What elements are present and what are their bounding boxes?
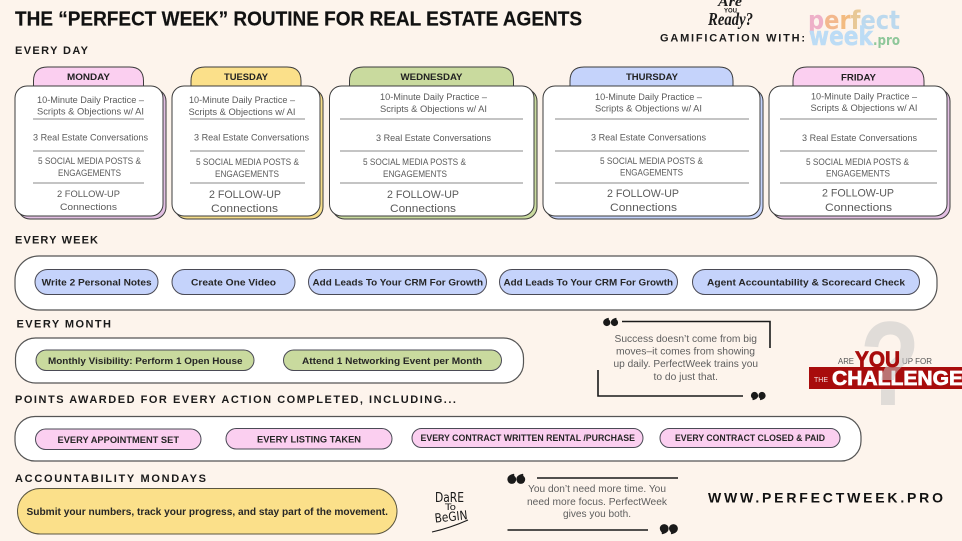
wednesday tab xyxy=(350,67,514,86)
friday tab xyxy=(793,67,924,86)
icon: dare to begin xyxy=(432,491,468,532)
monday tasks: 3 Real Estate Conversations xyxy=(33,132,148,144)
icon: grey question mark: ? xyxy=(860,297,920,431)
friday shadow xyxy=(772,89,950,219)
panel: points xyxy=(15,416,861,461)
monday tasks xyxy=(33,95,148,213)
pill: contract written xyxy=(412,428,643,448)
icon: dare to begin: To xyxy=(444,503,457,513)
monday tasks: 2 FOLLOW-UP xyxy=(57,189,120,200)
panel: thursday xyxy=(543,67,763,219)
wednesday tasks: 5 SOCIAL MEDIA POSTS & xyxy=(363,157,467,168)
pill: add leads two xyxy=(500,270,678,294)
wednesday tasks: 10-Minute Daily Practice – xyxy=(380,92,488,103)
pill: contract written: EVERY CONTRACT WRITTEN RENTAL /PURCHASE xyxy=(420,433,635,444)
badge: are you up for the challenge: CHALLENGE xyxy=(832,368,962,390)
thursday tasks: 10-Minute Daily Practice – xyxy=(595,92,703,103)
quote: success xyxy=(598,318,770,400)
thursday tab xyxy=(570,67,733,86)
quote text: to do just that. xyxy=(654,372,718,383)
pill: listing taken: EVERY LISTING TAKEN xyxy=(257,434,361,446)
pill: add leads one: Add Leads To Your CRM For Growth xyxy=(312,278,483,288)
tuesday shadow xyxy=(175,89,323,219)
wednesday tasks: 3 Real Estate Conversations xyxy=(376,133,491,144)
wednesday tasks: ENGAGEMENTS xyxy=(383,169,447,180)
panel: wednesday xyxy=(330,67,537,219)
heading: accountability mondays: ACCOUNTABILITY MONDAYS xyxy=(15,473,206,485)
tuesday tasks: Scripts & Objections w/ AI xyxy=(188,107,296,118)
quote text: moves–it comes from showing xyxy=(616,346,755,358)
logo: perfectweek.pro: week xyxy=(809,22,874,52)
quote: focus xyxy=(507,474,678,534)
pill: contract closed xyxy=(660,428,840,448)
monday shadow xyxy=(18,89,166,219)
title: THE “PERFECT WEEK” ROUTINE FOR REAL ESTATE AGENTS xyxy=(15,8,582,30)
friday tasks: ENGAGEMENTS xyxy=(826,168,890,180)
pill: personal notes xyxy=(35,270,158,294)
thursday tasks: 3 Real Estate Conversations xyxy=(591,132,706,144)
monday card xyxy=(15,86,163,216)
quote text: You don’t need more time. You xyxy=(528,484,666,495)
icon: are you ready lettering xyxy=(707,0,753,29)
thursday shadow xyxy=(546,89,763,219)
badge: are you up for the challenge: UP FOR xyxy=(902,357,932,366)
pill: networking event: Attend 1 Networking Event per Month xyxy=(302,356,482,367)
icon: are you ready lettering: YOU xyxy=(724,8,737,14)
friday tasks: Connections xyxy=(825,202,893,214)
icon: dare to begin: DaRE xyxy=(435,491,464,506)
pill: networking event xyxy=(284,350,502,370)
friday label: FRIDAY xyxy=(841,72,877,84)
wednesday card xyxy=(330,86,534,216)
thursday tasks xyxy=(591,92,706,214)
panel: friday xyxy=(769,67,950,219)
pill: add leads one xyxy=(308,270,486,294)
logo: perfectweek.pro: .pro xyxy=(873,33,900,49)
pill: create video xyxy=(172,270,295,294)
badge: are you up for the challenge: ARE xyxy=(838,357,854,366)
friday tasks: 2 FOLLOW-UP xyxy=(822,188,894,200)
friday tasks xyxy=(802,92,918,214)
wednesday tasks: Connections xyxy=(390,203,457,215)
tuesday tasks: ENGAGEMENTS xyxy=(215,169,279,180)
logo: perfectweek.pro: perfect xyxy=(808,6,900,36)
thursday tasks: Connections xyxy=(610,202,678,214)
pill: personal notes: Write 2 Personal Notes xyxy=(42,278,152,288)
callout: accountability: Submit your numbers, track your progress, and stay part of the movement. xyxy=(26,507,388,518)
pill: appointment set: EVERY APPOINTMENT SET xyxy=(58,435,179,446)
tuesday tasks: 5 SOCIAL MEDIA POSTS & xyxy=(196,157,300,168)
monday tasks: ENGAGEMENTS xyxy=(58,168,121,179)
quote text xyxy=(527,484,668,520)
pill: accountability check: Agent Accountability & Scorecard Check xyxy=(707,278,906,288)
tuesday tasks: 10-Minute Daily Practice – xyxy=(189,95,296,106)
badge: are you up for the challenge: THE xyxy=(814,377,828,384)
quote text: gives you both. xyxy=(563,509,631,520)
tuesday tasks: 3 Real Estate Conversations xyxy=(194,132,309,144)
pill: add leads two: Add Leads To Your CRM For Growth xyxy=(504,278,673,288)
heading: points awarded: POINTS AWARDED FOR EVERY ACTION COMPLETED, INCLUDING... xyxy=(15,394,456,406)
quote text: need more focus. PerfectWeek xyxy=(527,497,668,508)
friday card xyxy=(769,86,947,216)
monday tasks: Connections xyxy=(60,202,117,213)
pill: listing taken xyxy=(226,428,392,449)
icon: are you ready lettering: Ready? xyxy=(707,9,753,29)
friday tasks: 3 Real Estate Conversations xyxy=(802,133,917,144)
tuesday tasks: 2 FOLLOW-UP xyxy=(209,189,281,201)
icon: closing quote marks xyxy=(660,524,678,534)
pill: appointment set xyxy=(36,429,201,450)
monday tasks: 5 SOCIAL MEDIA POSTS & xyxy=(38,156,142,167)
panel: every month xyxy=(16,338,524,383)
monday tasks: 10-Minute Daily Practice – xyxy=(37,95,145,106)
heading: gamification: GAMIFICATION WITH: xyxy=(660,32,805,44)
tuesday card xyxy=(172,86,320,216)
wednesday shadow xyxy=(332,89,537,219)
pill: open house xyxy=(36,350,254,370)
badge: are you up for the challenge xyxy=(809,297,962,431)
website url: WWW.PERFECTWEEK.PRO xyxy=(708,490,943,506)
pill: accountability check xyxy=(692,270,920,294)
monday label: MONDAY xyxy=(67,72,111,83)
panel: every week xyxy=(15,256,937,310)
panel: tuesday xyxy=(172,67,323,219)
thursday tasks: 5 SOCIAL MEDIA POSTS & xyxy=(600,156,704,167)
badge: are you up for the challenge: YOU xyxy=(855,347,900,372)
quote text: up daily. PerfectWeek trains you xyxy=(614,359,758,370)
thursday tasks: ENGAGEMENTS xyxy=(620,168,683,178)
tuesday label: TUESDAY xyxy=(224,72,269,83)
thursday label: THURSDAY xyxy=(626,72,679,83)
logo: perfectweek.pro xyxy=(808,6,900,52)
thursday card xyxy=(543,86,760,216)
friday tasks: 5 SOCIAL MEDIA POSTS & xyxy=(806,157,910,168)
tuesday tasks xyxy=(188,95,309,215)
icon: dare to begin: BeGIN xyxy=(434,507,468,526)
pill: open house: Monthly Visibility: Perform 1 Open House xyxy=(48,356,242,367)
tuesday tasks: Connections xyxy=(211,203,279,215)
icon: opening quote marks xyxy=(603,318,618,326)
wednesday tasks xyxy=(363,92,491,215)
thursday tasks: Scripts & Objections w/ AI xyxy=(595,104,702,114)
pill: create video: Create One Video xyxy=(191,278,276,288)
wednesday tasks: Scripts & Objections w/ AI xyxy=(380,104,487,115)
pill: contract closed: EVERY CONTRACT CLOSED & PAID xyxy=(675,433,825,444)
icon: closing quote marks xyxy=(751,392,766,400)
friday tasks: Scripts & Objections w/ AI xyxy=(810,103,918,114)
heading: every day: EVERY DAY xyxy=(15,45,89,57)
monday tab xyxy=(34,67,144,86)
icon: opening quote marks xyxy=(507,474,525,484)
wednesday tasks: 2 FOLLOW-UP xyxy=(387,189,459,201)
panel: monday xyxy=(15,67,166,219)
heading: every month: EVERY MONTH xyxy=(16,318,111,330)
heading: every week: EVERY WEEK xyxy=(15,234,98,246)
tuesday tab xyxy=(191,67,301,86)
callout: accountability xyxy=(18,488,397,534)
wednesday label: WEDNESDAY xyxy=(400,72,463,83)
quote text xyxy=(614,334,758,383)
quote text: Success doesn’t come from big xyxy=(614,334,757,345)
thursday tasks: 2 FOLLOW-UP xyxy=(607,188,679,200)
friday tasks: 10-Minute Daily Practice – xyxy=(811,92,918,102)
monday tasks: Scripts & Objections w/ AI xyxy=(37,106,144,118)
